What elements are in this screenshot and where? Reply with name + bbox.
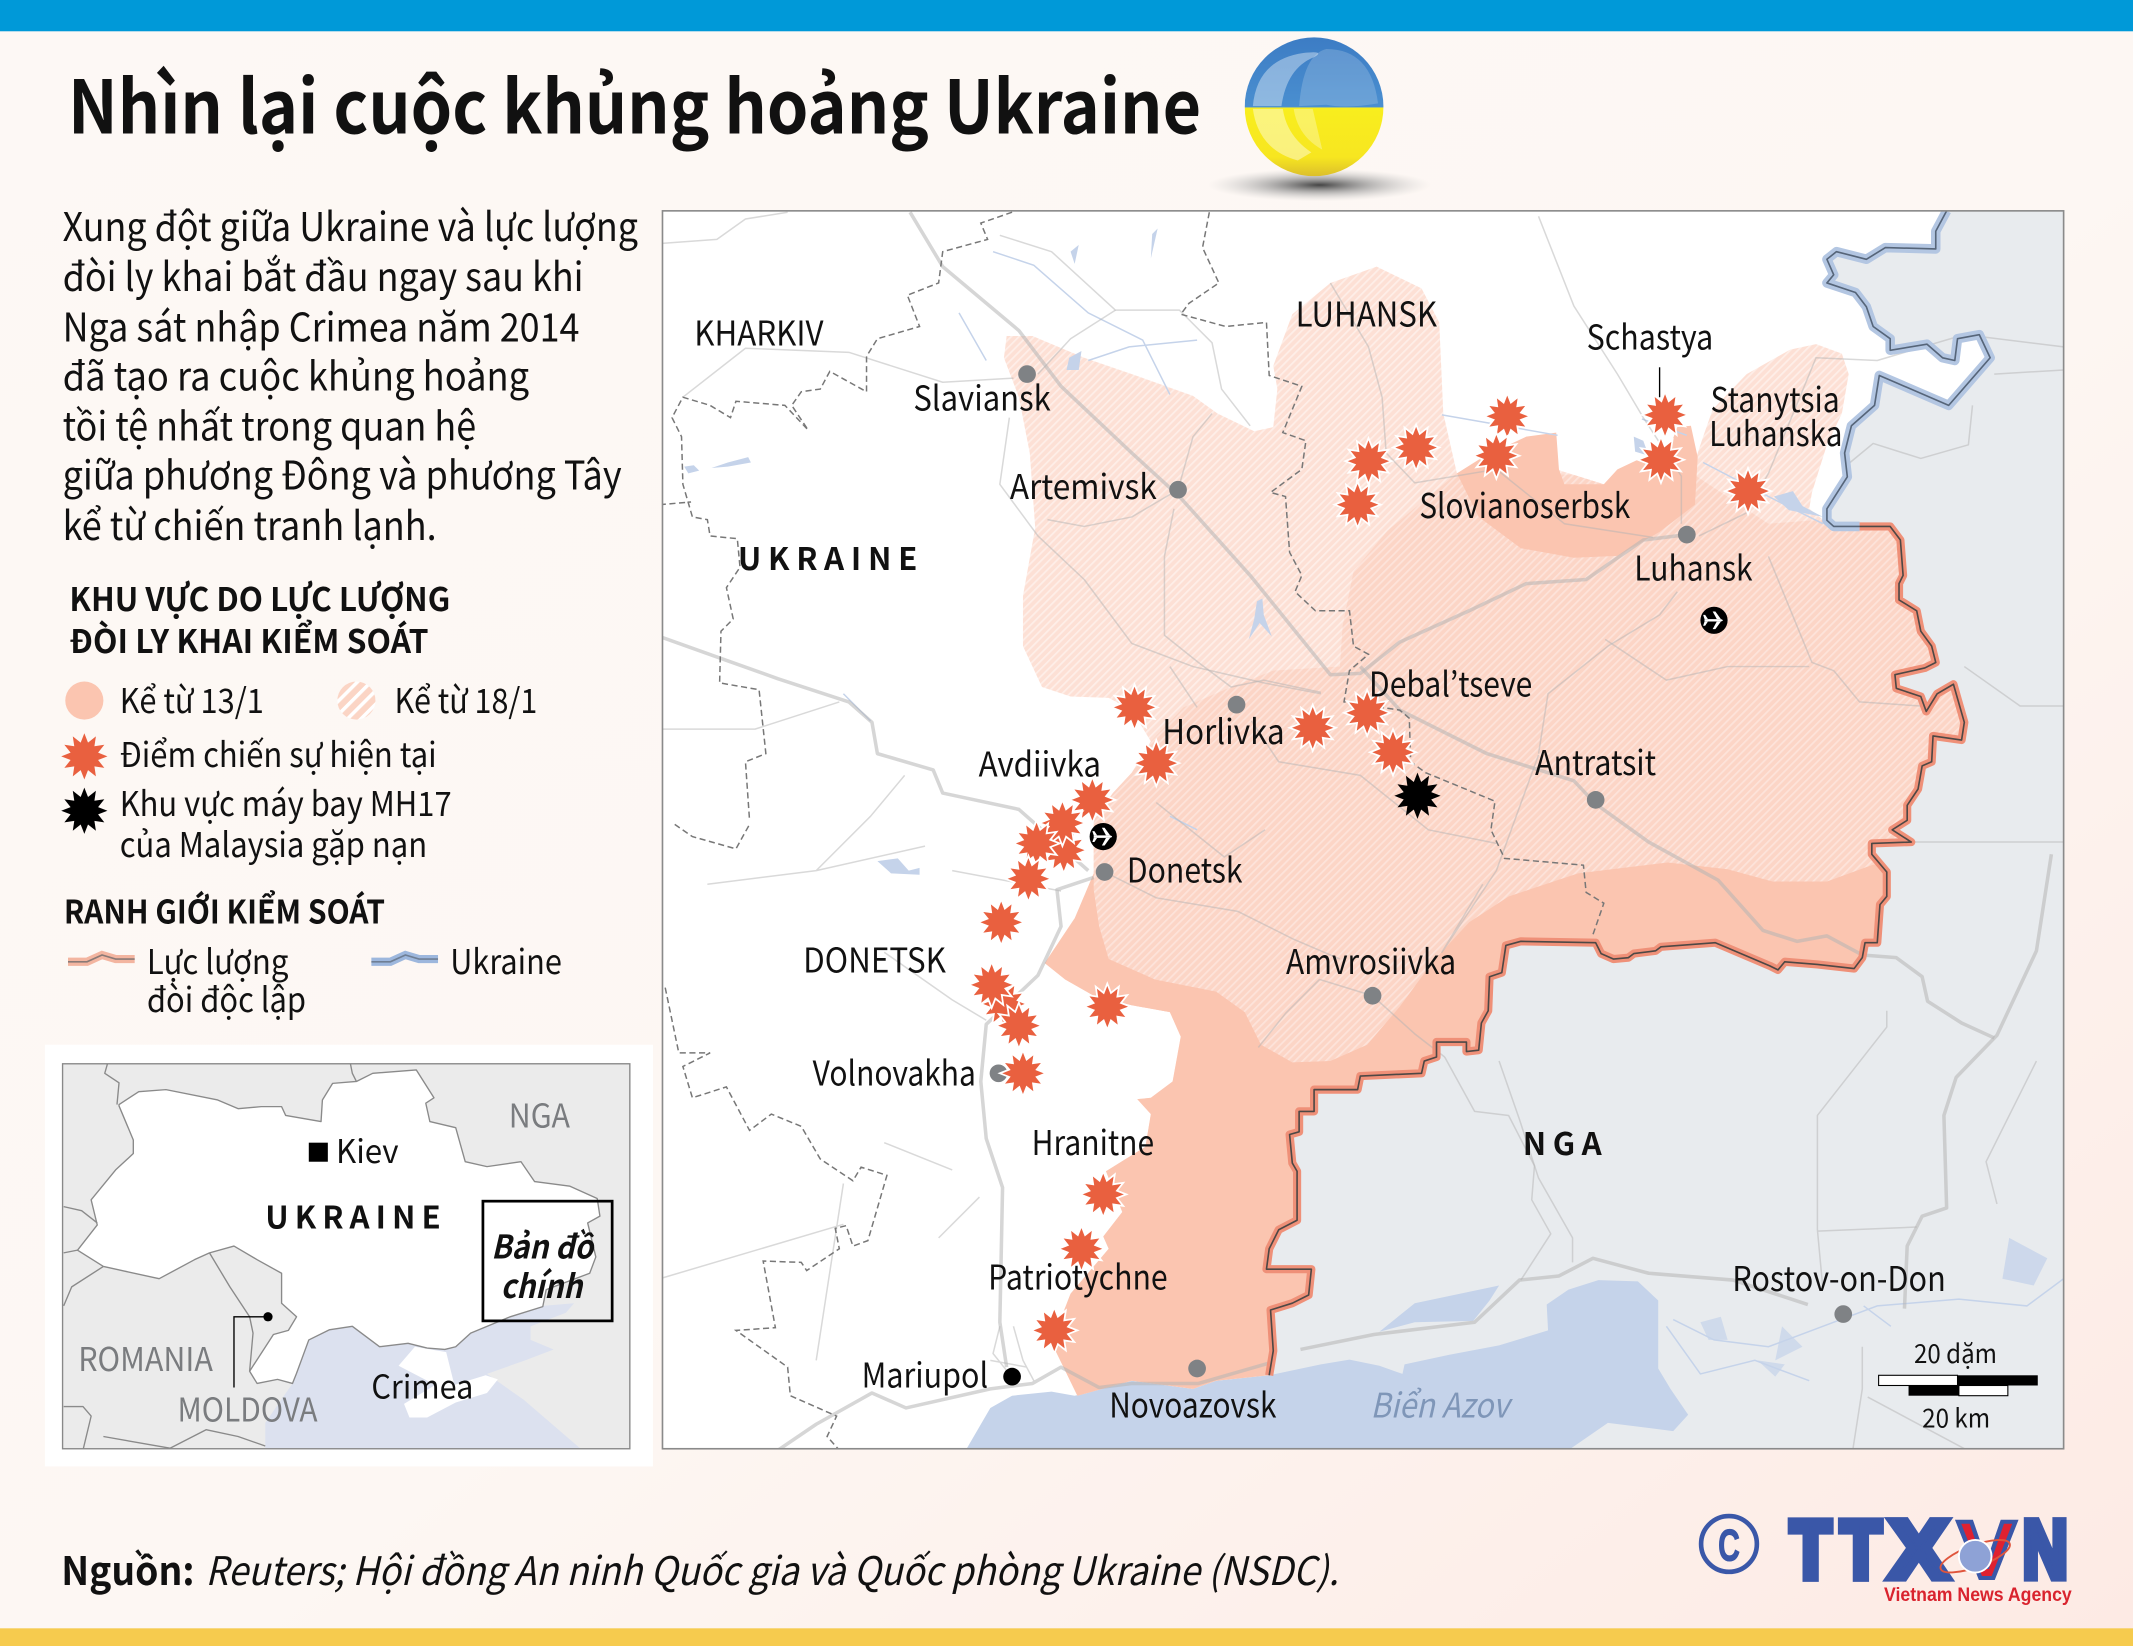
inset: country labels: Crimea — [371, 1361, 473, 1408]
map labels: KHARKIV — [694, 306, 824, 355]
map labels: UKRAINE — [738, 535, 917, 580]
city dots — [990, 365, 1852, 1385]
logo: TTXVN Vietnam News Agency: N — [2023, 1504, 2068, 1595]
scale bar — [1879, 1334, 2038, 1436]
top blue bar — [0, 0, 2133, 31]
inset: country labels: MOLDOVA — [178, 1385, 318, 1432]
legend: controlled areas — [61, 574, 537, 867]
inset: country labels: NGA — [509, 1091, 570, 1138]
legend heading — [69, 574, 450, 663]
map labels: Horlivka — [1162, 705, 1285, 754]
source note: Reuters; Hội đồng An ninh Quốc gia và Quốc phòng Ukraine (NSDC). — [205, 1540, 1339, 1597]
map labels: LUHANSK — [1296, 287, 1437, 336]
roads — [660, 212, 2064, 1450]
panel: inset locator map — [45, 1045, 653, 1466]
inset: Kiev: Kiev — [336, 1126, 399, 1173]
map labels: Artemivsk — [1010, 460, 1157, 509]
control lines heading: RANH GIỚI KIỂM SOÁT — [64, 887, 385, 934]
map labels: Debal’tseve — [1369, 657, 1532, 706]
inset: Kiev — [309, 1126, 399, 1173]
intro text block: đã tạo ra cuộc khủng hoảng — [63, 345, 529, 402]
Ukraine control line — [1827, 211, 1990, 526]
logo: TTXVN Vietnam News Agency: T — [1841, 1504, 1881, 1595]
inset: neighbouring borders — [64, 1064, 356, 1450]
inset: main map box — [483, 1201, 612, 1321]
scale bar: 20 dặm — [1914, 1334, 1997, 1371]
logo: TTXVN Vietnam News Agency: V — [1958, 1505, 2016, 1596]
Sea of Azov — [966, 1280, 1688, 1450]
inset: country labels: UKRAINE — [265, 1193, 441, 1238]
icon: Luhansk airport — [1700, 607, 1728, 634]
legend: hatched area: Kể từ 18/1 — [394, 674, 537, 723]
map labels: Biển Azov — [1370, 1378, 1513, 1427]
intro text block: tồi tệ nhất trong quan hệ — [63, 396, 476, 453]
solid area since 13/1: Slovianoserbsk lobe — [1457, 426, 1698, 558]
Russia territory — [1266, 211, 2064, 1456]
legend: control lines — [64, 887, 562, 1022]
inset: Moldova pointer — [234, 1312, 273, 1388]
map labels: Rostov-on-Don — [1732, 1252, 1946, 1301]
logo: TTXVN Vietnam News Agency: Vietnam News Agency — [1884, 1585, 2072, 1606]
intro text block: kể từ chiến tranh lạnh. — [63, 495, 437, 552]
legend: Ukraine line — [371, 935, 562, 984]
legend: solid area: Kể từ 13/1 — [120, 674, 264, 723]
MH17 crash site — [1394, 773, 1441, 819]
oblast boundaries — [660, 212, 1604, 1450]
legend: MH17 crash area: Khu vực máy bay MH17 — [120, 777, 452, 826]
map labels — [694, 287, 1946, 1427]
logo: TTXVN Vietnam News Agency — [1790, 1504, 2072, 1606]
map labels: Hranitne — [1032, 1116, 1154, 1165]
map labels: Luhanska — [1709, 407, 1842, 456]
map labels: Avdiivka — [979, 738, 1101, 787]
map labels: Antratsit — [1535, 736, 1656, 785]
inset: sea — [265, 1303, 582, 1450]
map labels: Stanytsia — [1710, 373, 1840, 422]
inset: Crimea — [399, 1347, 498, 1417]
legend: MH17 crash area — [61, 777, 452, 867]
intro text block: giữa phương Đông và phương Tây — [63, 445, 622, 502]
title: Nhìn lại cuộc khủng hoảng Ukraine — [68, 49, 1201, 155]
rivers and lakes — [684, 229, 2064, 1381]
icon: copyright mark: C — [1718, 1519, 1740, 1570]
separatist control line — [1266, 526, 1964, 1375]
solid area since 13/1: south — [1045, 862, 1883, 1396]
icon: Donetsk airport — [1090, 823, 1117, 850]
legend: hatched area — [337, 674, 537, 723]
map labels: Luhansk — [1634, 542, 1753, 591]
legend: Ukraine line: Ukraine — [450, 935, 562, 984]
legend: separatist line: Lực lượng — [147, 935, 288, 984]
map labels: Slovianoserbsk — [1419, 479, 1630, 528]
intro text block: đòi ly khai bắt đầu ngay sau khi — [63, 246, 584, 303]
denser hatched core — [1088, 473, 1972, 1095]
icon: Ukraine flag globe — [1220, 37, 1418, 200]
hatched area since 18/1 — [1004, 266, 1849, 1396]
map labels: Amvrosiivka — [1286, 935, 1456, 984]
map labels: DONETSK — [803, 934, 946, 983]
map labels: Schastya — [1587, 310, 1713, 359]
map labels: Slaviansk — [913, 372, 1051, 421]
inset: country labels — [78, 1091, 570, 1432]
bottom yellow bar — [0, 1628, 2133, 1646]
map labels: Donetsk — [1127, 844, 1243, 893]
intro text block: Nga sát nhập Crimea năm 2014 — [63, 296, 580, 353]
source note: Nguồn: — [61, 1540, 195, 1597]
icon: copyright mark — [1701, 1516, 1757, 1572]
inset: Ukraine territory — [78, 1070, 600, 1383]
Taganrog bay lagoon — [1379, 1286, 1499, 1332]
fighting points — [969, 392, 1771, 1354]
inset: country labels: ROMANIA — [78, 1334, 213, 1381]
legend: MH17 crash area: của Malaysia gặp nạn — [120, 818, 427, 867]
legend heading: KHU VỰC DO LỰC LƯỢNG — [69, 574, 450, 621]
logo: TTXVN Vietnam News Agency: T — [1790, 1504, 1831, 1595]
map labels: Mariupol — [862, 1348, 988, 1397]
legend: fighting point: Điểm chiến sự hiện tại — [120, 728, 437, 777]
map labels: Patriotychne — [988, 1250, 1168, 1299]
intro text block — [63, 196, 638, 552]
map labels: Novoazovsk — [1109, 1378, 1277, 1427]
Schastya leader line — [1659, 367, 1661, 397]
scale bar: 20 km — [1922, 1399, 1990, 1436]
legend heading: ĐÒI LY KHAI KIỂM SOÁT — [69, 616, 429, 663]
logo: TTXVN Vietnam News Agency: X — [1889, 1504, 1948, 1595]
map labels: Volnovakha — [813, 1046, 976, 1095]
legend: separatist line: đòi độc lập — [147, 973, 306, 1022]
legend: separatist line — [68, 935, 306, 1022]
intro text block: Xung đột giữa Ukraine và lực lượng — [63, 196, 638, 253]
inset: main map box: Bản đồ — [491, 1221, 595, 1268]
inset: main map box: chính — [501, 1261, 584, 1308]
panel: main conflict map — [660, 211, 2064, 1496]
map labels: NGA — [1523, 1120, 1603, 1165]
legend: solid area — [65, 674, 264, 723]
